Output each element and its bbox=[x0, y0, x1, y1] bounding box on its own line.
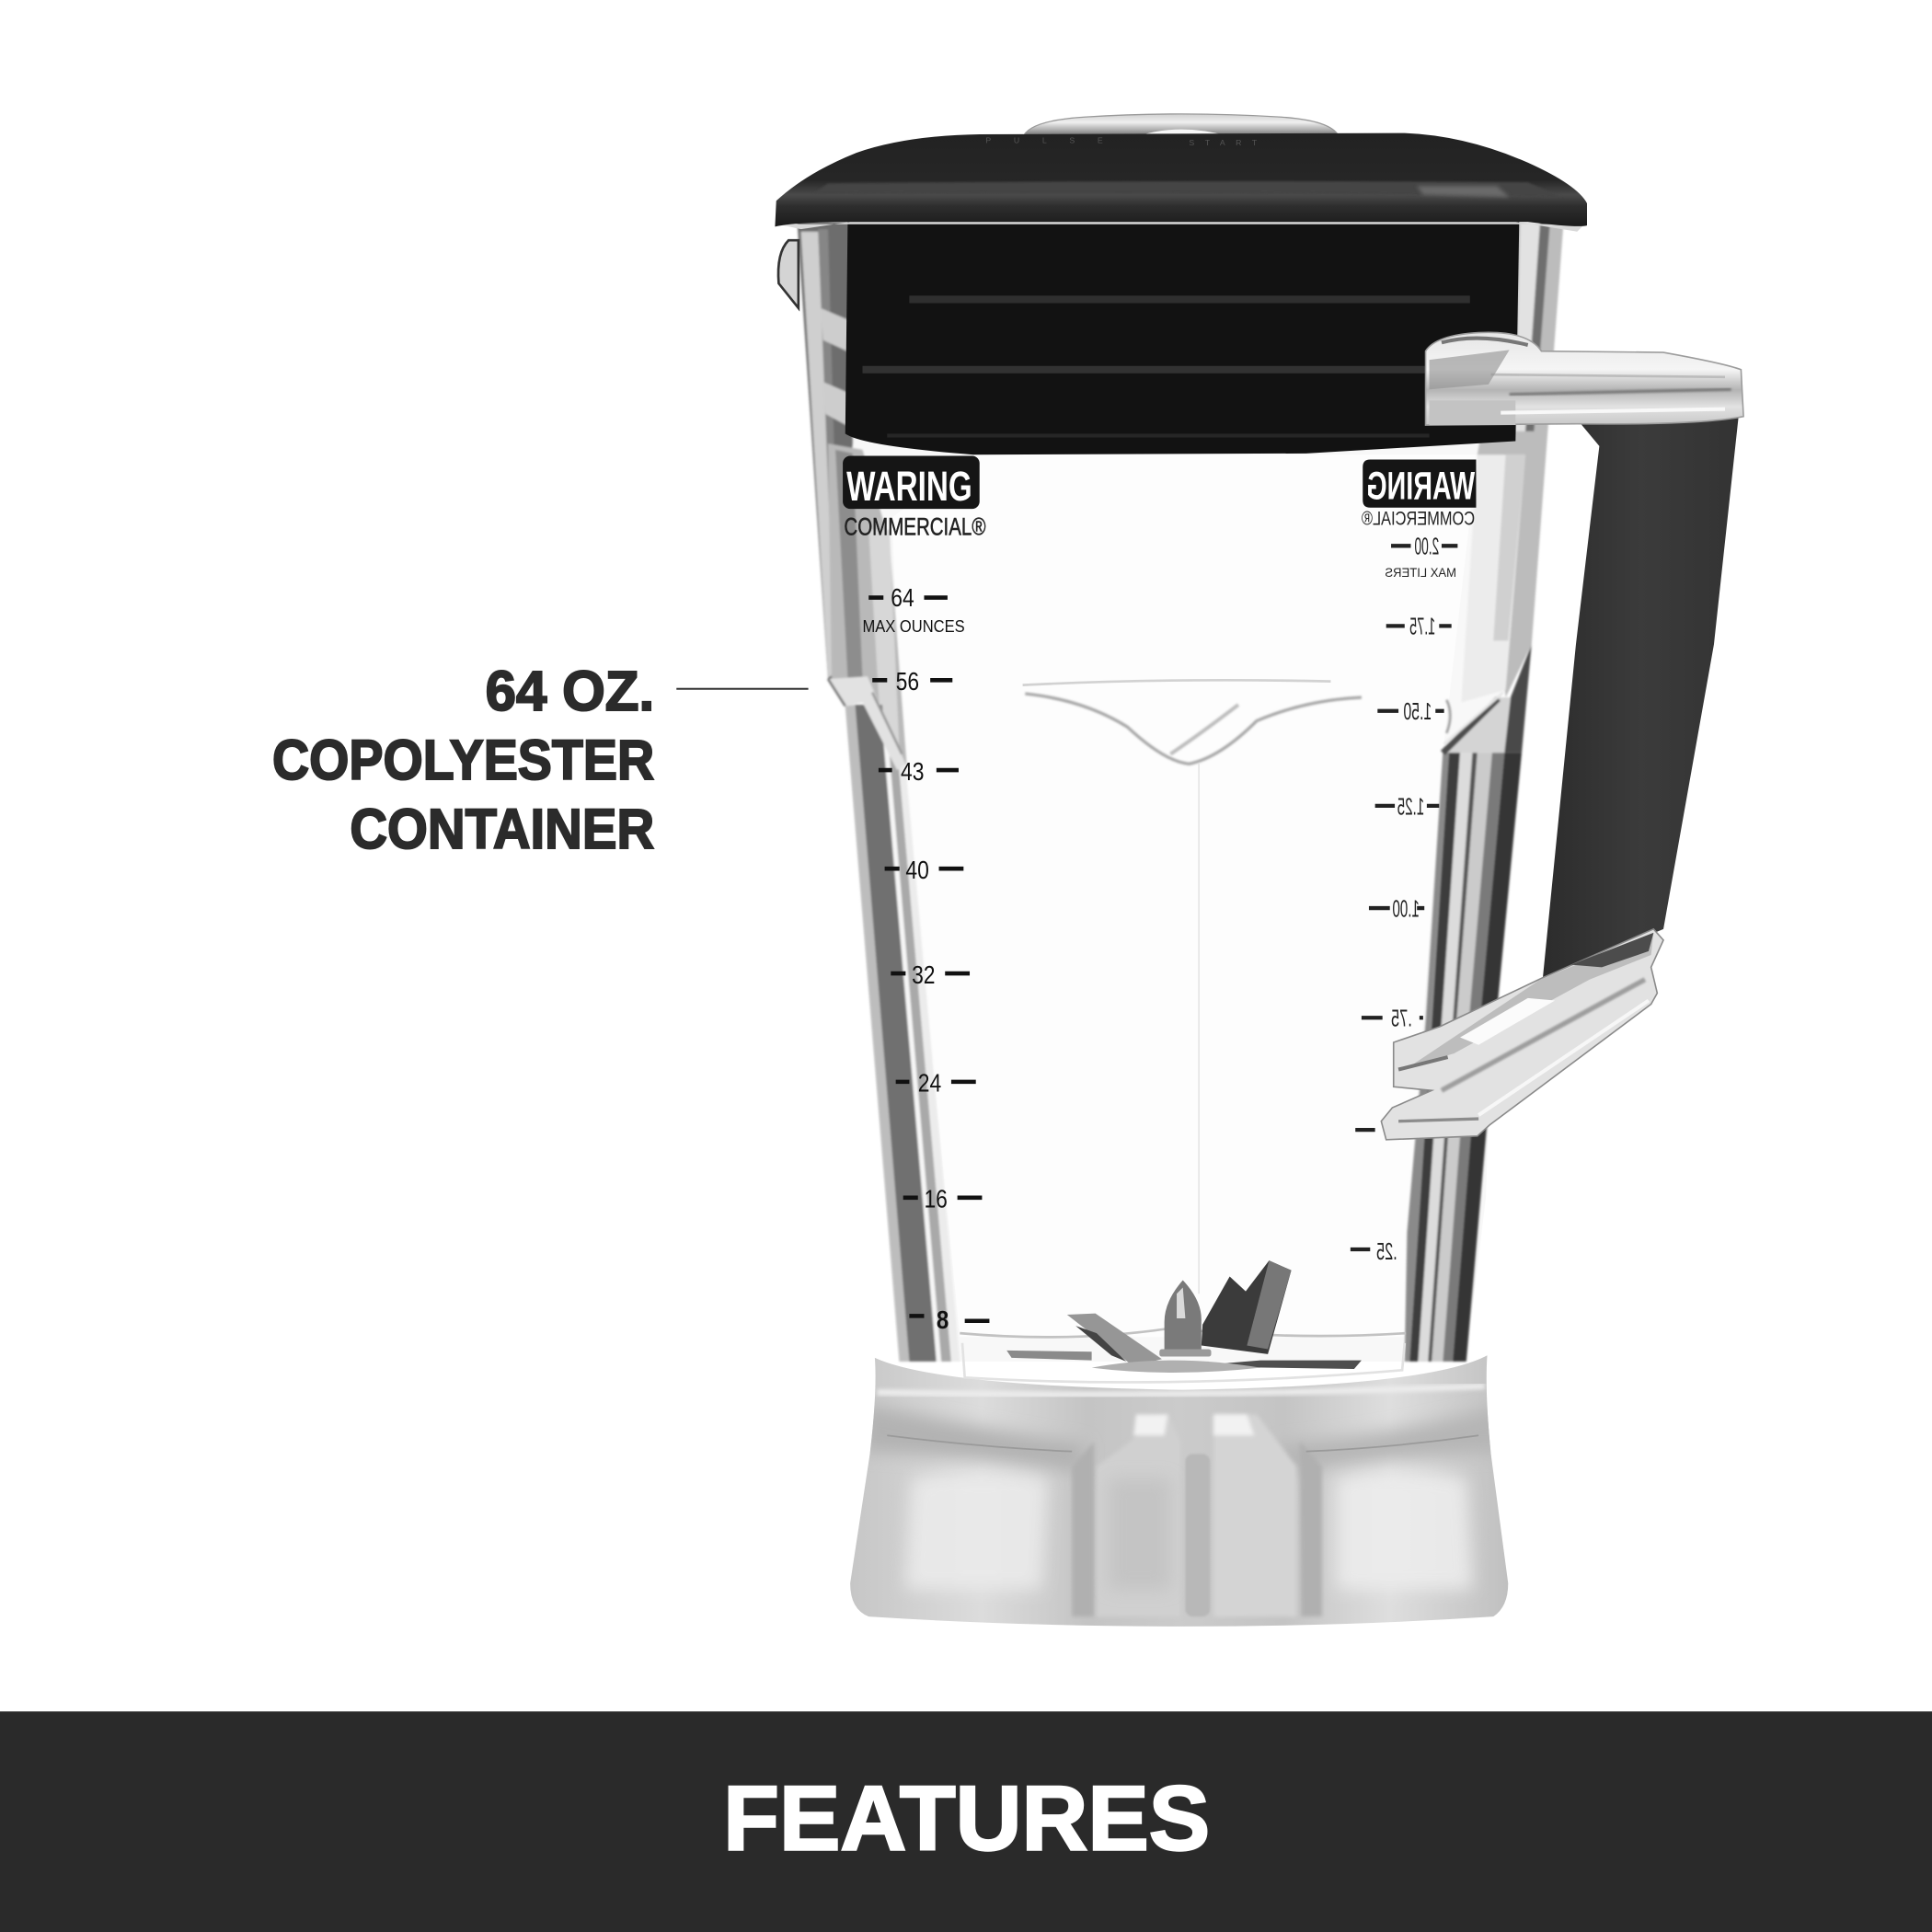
frosted base bbox=[850, 1355, 1510, 1627]
left lug behind rim bbox=[778, 240, 799, 308]
ounce scale: 64 bbox=[891, 583, 914, 612]
ounce scale: 16 bbox=[924, 1184, 948, 1213]
footer band bbox=[0, 1711, 1932, 1932]
callout: container label: CONTAINER bbox=[350, 798, 654, 861]
right logo: mirrored Waring Commercial: COMMERCIAL® bbox=[1362, 508, 1475, 530]
footer heading: FEATURES bbox=[723, 1767, 1210, 1869]
ounce scale: MAX OUNCES bbox=[862, 616, 965, 636]
lid: black: PULSE bbox=[985, 135, 1103, 144]
rear horizontal blades bbox=[1006, 1351, 1092, 1361]
ounce scale: 43 bbox=[901, 757, 924, 786]
left logo: Waring Commercial: COMMERCIAL® bbox=[844, 512, 986, 540]
upper handle clip bbox=[1426, 332, 1743, 425]
right wall of jar bbox=[1405, 222, 1564, 1362]
callout leader line bbox=[676, 688, 809, 690]
ounce scale bbox=[863, 583, 989, 1334]
black rubber handle grip bbox=[1543, 417, 1739, 980]
lid cap: clear dome bbox=[1023, 114, 1340, 138]
left logo: Waring Commercial bbox=[843, 456, 986, 540]
ounce scale: 32 bbox=[912, 960, 936, 989]
liter scale, mirrored: 2.00 bbox=[1414, 535, 1439, 560]
ounce scale: 24 bbox=[918, 1069, 941, 1098]
bullet nut bbox=[1165, 1281, 1202, 1350]
dark upper liner with ribs bbox=[845, 219, 1519, 454]
left logo: Waring Commercial: WARING bbox=[846, 463, 972, 510]
liter scale, mirrored: 1.50 bbox=[1403, 699, 1432, 725]
liter scale, mirrored: MAX LITERS bbox=[1385, 566, 1456, 580]
callout: container label: COPOLYESTER bbox=[272, 729, 654, 792]
hub plate bbox=[1092, 1361, 1260, 1373]
ounce scale: 8 bbox=[937, 1305, 949, 1334]
lower handle clip bbox=[1381, 929, 1663, 1140]
liter scale, mirrored: 1.00 bbox=[1392, 896, 1420, 922]
ounce scale: 40 bbox=[905, 856, 929, 884]
rim under lid bbox=[778, 222, 1584, 232]
jar body and clear interior bbox=[798, 219, 1564, 1362]
right logo: mirrored Waring Commercial bbox=[1362, 460, 1476, 530]
left wall of jar bbox=[798, 222, 960, 1362]
lid: black: START bbox=[1189, 138, 1258, 147]
jar floor bbox=[960, 1328, 1406, 1382]
liter scale, mirrored: .75 bbox=[1391, 1006, 1412, 1032]
right logo: mirrored Waring Commercial: WARING bbox=[1366, 464, 1475, 508]
upright blade left bbox=[1067, 1314, 1162, 1366]
upright blade right bbox=[1202, 1260, 1292, 1354]
product photo: blender container bbox=[775, 114, 1743, 1627]
lid: black bbox=[775, 133, 1587, 226]
liter scale, mirrored: 1.25 bbox=[1397, 794, 1424, 820]
liter scale, mirrored: 1.75 bbox=[1409, 615, 1435, 640]
callout: container label: 64 OZ. bbox=[486, 660, 654, 723]
inner spout ridge bbox=[1023, 680, 1362, 764]
liter scale, mirrored bbox=[1351, 535, 1457, 1265]
steel blade assembly bbox=[1006, 1260, 1362, 1373]
ounce scale: 56 bbox=[896, 667, 919, 696]
callout: container label bbox=[272, 660, 654, 861]
liter scale, mirrored: .25 bbox=[1376, 1239, 1397, 1265]
